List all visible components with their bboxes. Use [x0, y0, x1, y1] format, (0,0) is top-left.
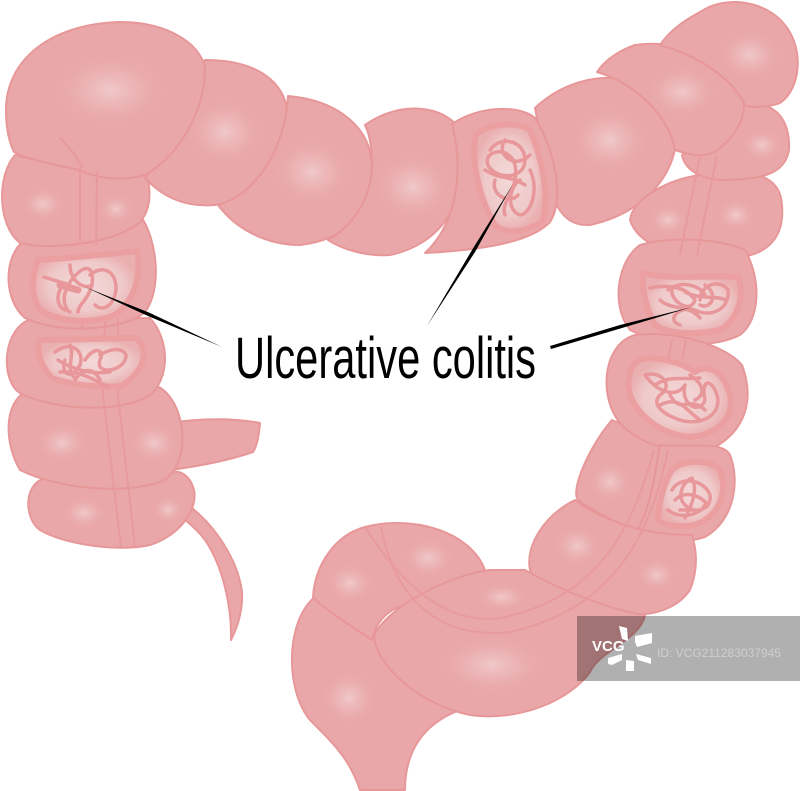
right segment 5 with ulcer: [635, 445, 735, 541]
watermark id: ID: VCG211283037945: [657, 646, 781, 660]
ulcer: right upper: [643, 273, 741, 333]
right segment 3 with ulcer: [619, 240, 756, 344]
top segment 5 with ulcer: [425, 109, 557, 253]
top-left big segment: [6, 22, 205, 179]
ascending segment 2: [8, 215, 156, 328]
top segment 2: [145, 60, 288, 205]
sigmoid lower: [374, 570, 645, 716]
watermark logo: [592, 626, 652, 671]
stub: [170, 419, 260, 470]
right segment 1: [682, 104, 789, 180]
watermark: [577, 616, 800, 681]
ulcer: top: [474, 125, 545, 231]
ascending segment 5: [28, 472, 195, 548]
ascending segment 3: [7, 318, 165, 408]
ulcer: right middle: [628, 358, 731, 437]
top segment 4: [328, 109, 464, 255]
right segment 6: [576, 420, 675, 532]
top segment 6: [535, 78, 676, 225]
ulcer: right lower: [658, 462, 723, 526]
watermark logo: VCG: [592, 638, 625, 655]
ulcer: left lower: [38, 338, 144, 387]
top segment 3: [218, 96, 372, 245]
ascending segment 1: [2, 155, 149, 246]
pointer: left: [85, 287, 222, 347]
rectum: [292, 596, 460, 790]
right segment 4 with ulcer: [607, 334, 748, 451]
label: Ulcerative colitis: Ulcerative colitis: [235, 326, 536, 391]
lower segment: [529, 500, 696, 615]
pointer: right: [550, 307, 692, 349]
taenia bands: [60, 138, 717, 633]
tail: [180, 505, 242, 640]
right segment 2: [630, 173, 782, 258]
pointer: top: [427, 184, 513, 326]
ascending segment 4: [9, 385, 182, 489]
top segment 7: [597, 44, 744, 155]
ulcer: left upper: [33, 251, 139, 321]
sigmoid loop: [313, 523, 485, 640]
top segment 8: [660, 2, 798, 107]
